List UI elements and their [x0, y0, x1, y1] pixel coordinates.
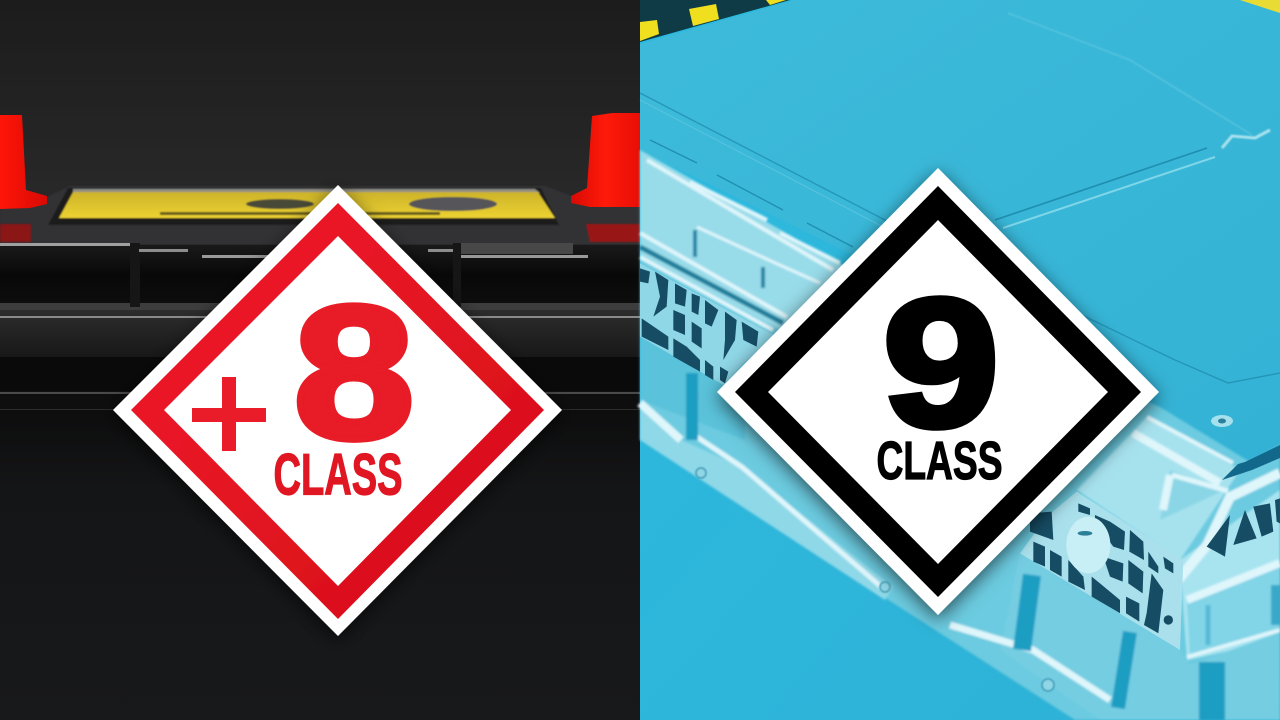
- battery body: [0, 243, 640, 720]
- icon: right red terminal cap: [571, 113, 640, 207]
- dark ticks and ribs: [692, 230, 1276, 720]
- flange highlights: [640, 160, 1280, 700]
- right vent grid: [1020, 492, 1280, 650]
- panel: lithium battery photo: [640, 0, 1280, 720]
- mounting bolts: [696, 468, 1054, 691]
- hazard stripe corner: [640, 0, 790, 42]
- plus sign: [192, 377, 266, 451]
- class label: CLASS: [274, 442, 402, 508]
- class label: CLASS: [876, 431, 1002, 491]
- battery lid: [0, 186, 640, 245]
- placard: class 9 miscellaneous: [717, 168, 1159, 615]
- panel: lead-acid battery photo: [0, 0, 640, 720]
- aluminium pack side: [640, 150, 1280, 720]
- placard: class 8 corrosive: [113, 185, 562, 636]
- left vent grid: [640, 263, 777, 385]
- lid corner hardware: [1211, 415, 1280, 480]
- pack lid: [640, 0, 1280, 462]
- red terminal reflections: [0, 224, 640, 242]
- icon: left red terminal cap: [0, 115, 47, 209]
- number 9: 9: [882, 260, 1000, 465]
- number 8: 8: [293, 267, 415, 479]
